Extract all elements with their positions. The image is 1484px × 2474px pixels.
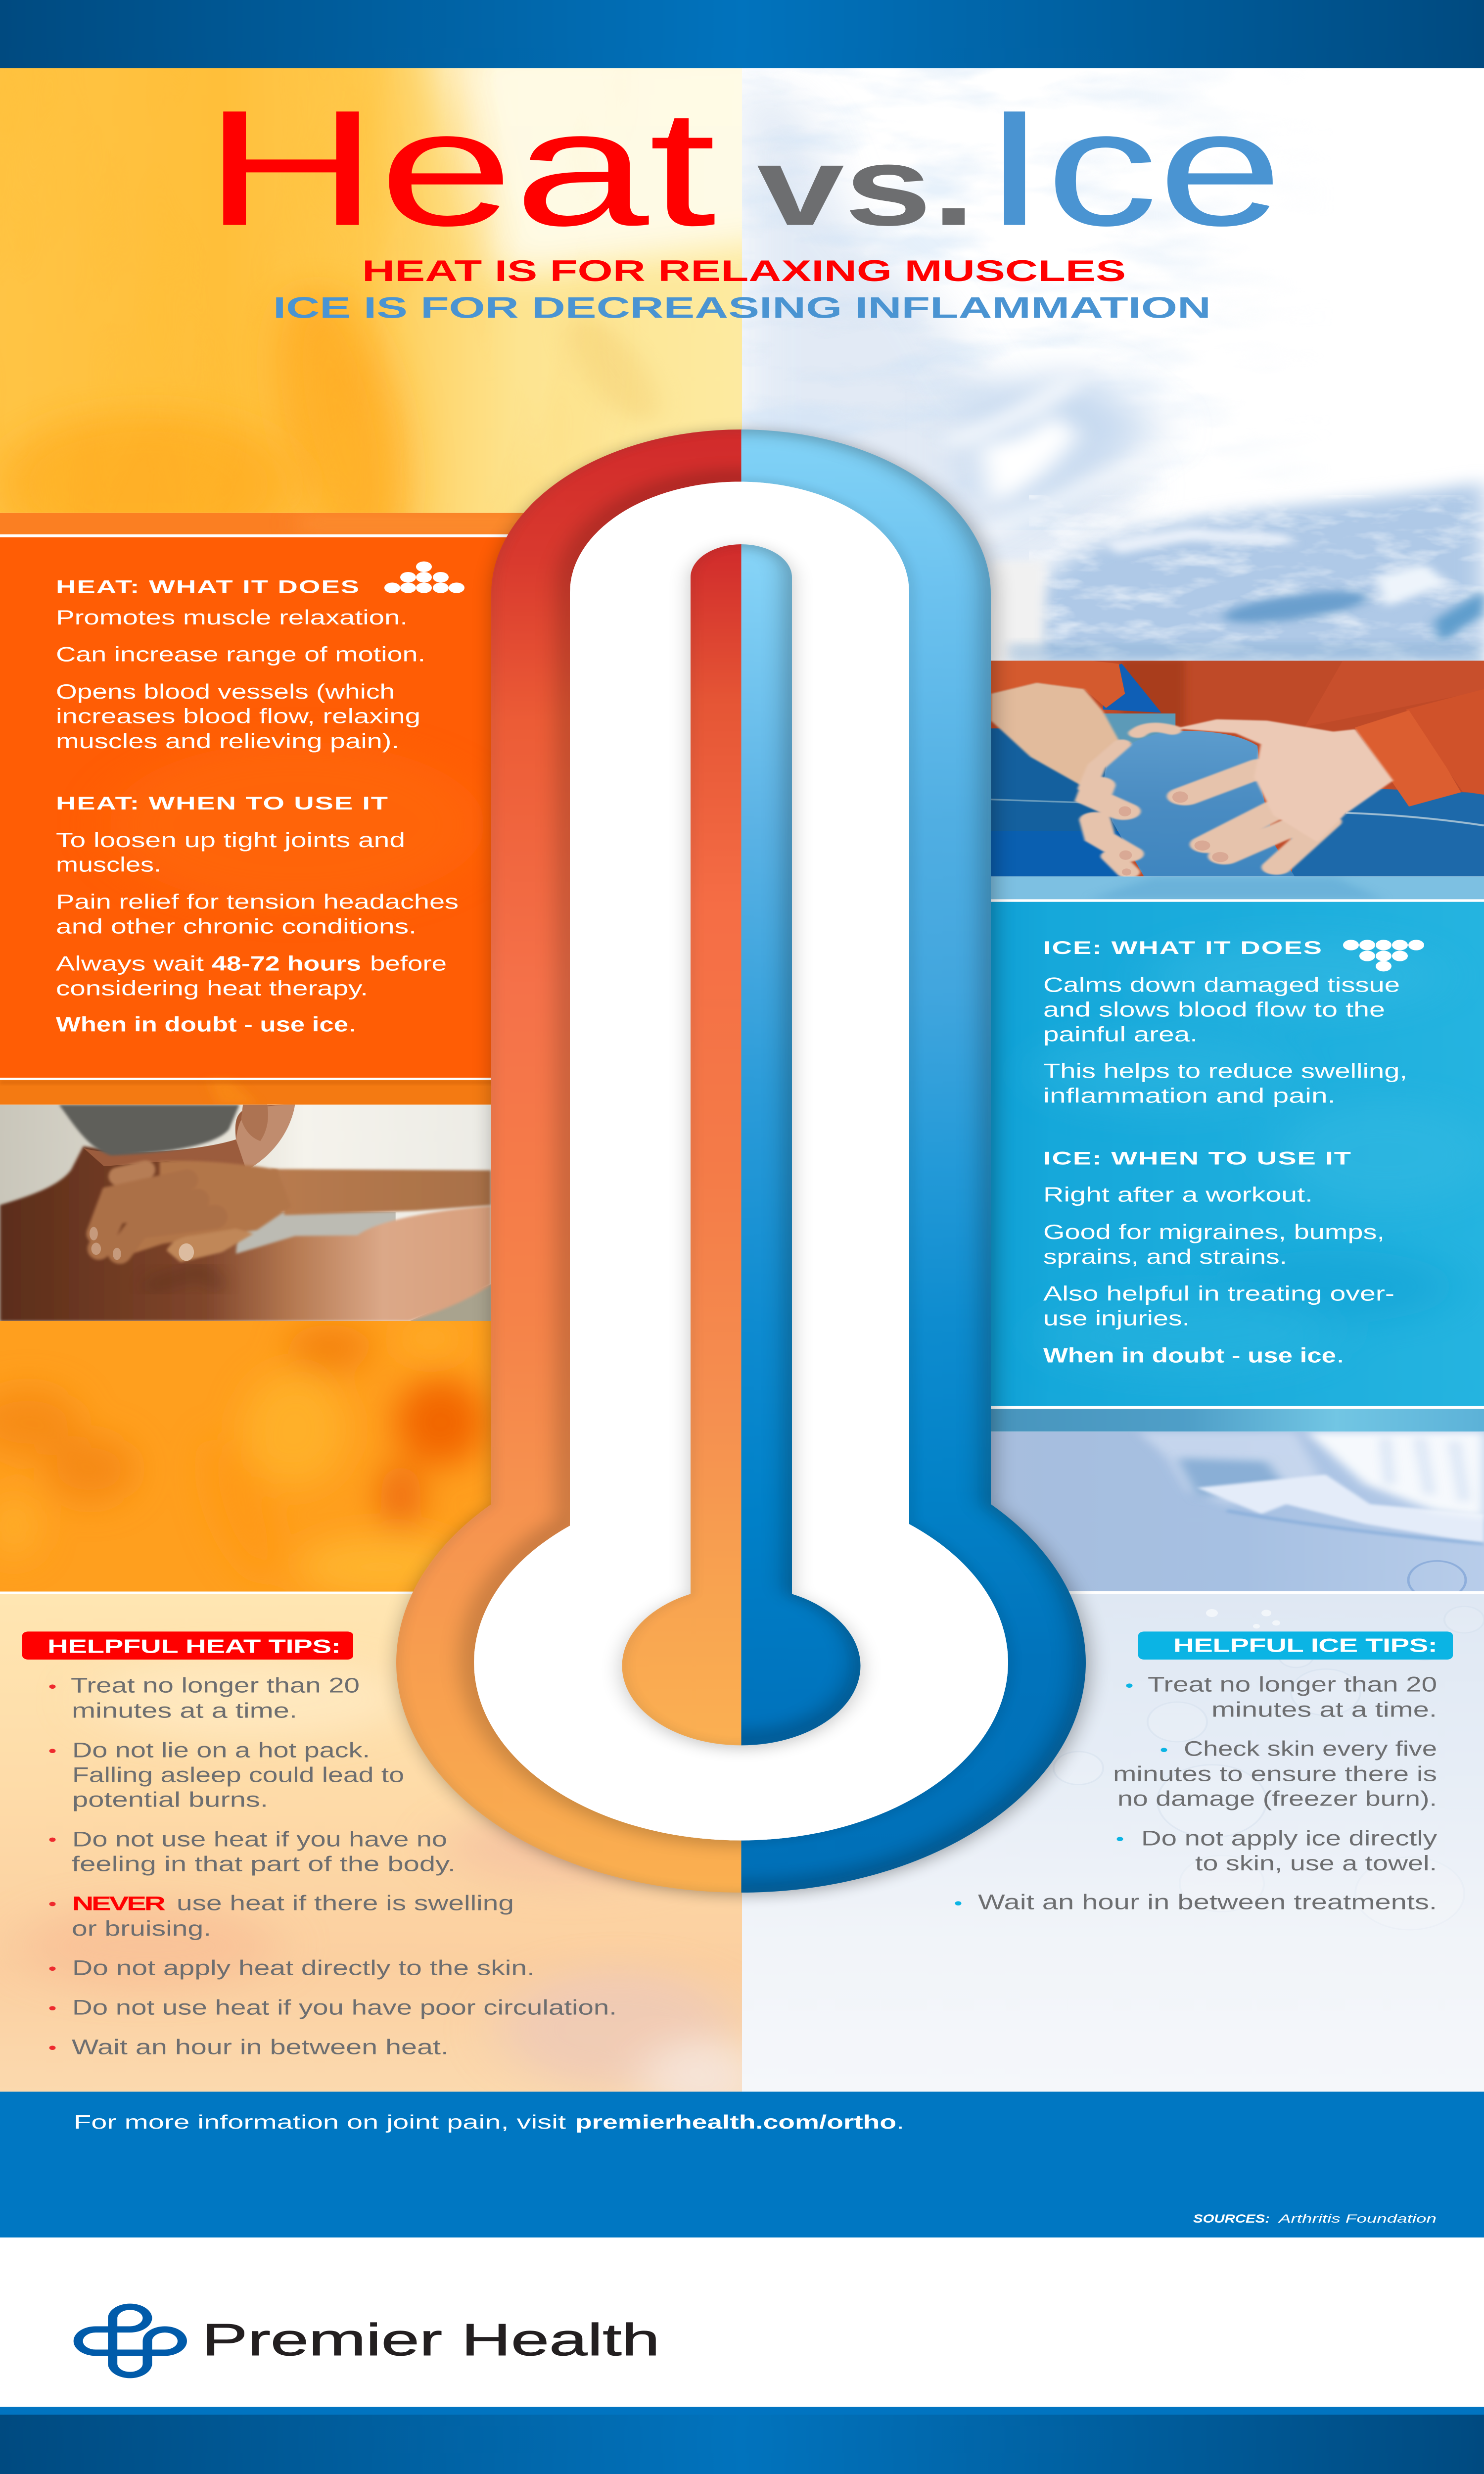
- text block: heat what it does: Can increase range of motion.: [56, 643, 425, 666]
- title: Heat: [203, 76, 717, 260]
- text block: heat when to use it: 48-72 hours: [212, 952, 361, 975]
- text block: heat when to use it: To loosen up tight joints and: [56, 829, 405, 852]
- list: heat tips: [49, 1673, 617, 2059]
- text block: heat when to use it: Always wait: [56, 952, 204, 975]
- text block: ice what it does: painful area.: [1043, 1023, 1198, 1046]
- list: heat tips: Do not lie on a hot pack.: [72, 1738, 370, 1762]
- title: [203, 76, 1283, 260]
- list: ice tips: to skin, use a towel.: [1195, 1852, 1437, 1875]
- photo: hands on knee: [991, 661, 1484, 877]
- text block: heat when to use it: muscles.: [56, 853, 161, 876]
- more information line: premierhealth.com/ortho: [575, 2111, 896, 2133]
- badge: helpful ice tips: HELPFUL ICE TIPS:: [1173, 1635, 1438, 1656]
- list: heat tips: Do not use heat if you have no: [72, 1827, 447, 1851]
- title: vs.: [757, 124, 975, 249]
- text block: heat what it does: Promotes muscle relaxation.: [56, 606, 408, 629]
- subtitle: HEAT IS FOR RELAXING MUSCLES: [362, 255, 1126, 287]
- icon: heat dots pointing up: [384, 562, 464, 593]
- more information line: .: [896, 2111, 904, 2133]
- text block: heat when to use it: before: [370, 952, 447, 975]
- text block: ice when to use it: .: [1336, 1344, 1345, 1367]
- text block: heat when to use it: Pain relief for tension headaches: [56, 891, 459, 913]
- subtitle: [273, 255, 1211, 325]
- text block: heat what it does: muscles and relieving pain).: [56, 730, 399, 753]
- list: ice tips: [955, 1672, 1438, 1914]
- list: heat tips: feeling in that part of the body.: [72, 1852, 456, 1876]
- text block: ice when to use it: When in doubt - use ice: [1043, 1344, 1336, 1367]
- thermometer drop shadow: [399, 431, 1089, 1895]
- logo: premier health: Premier Health: [202, 2315, 660, 2365]
- sources: Arthritis Foundation: [1278, 2212, 1437, 2225]
- text block: heat what it does: HEAT: WHAT IT DOES: [56, 577, 359, 597]
- text block: heat when to use it: [56, 793, 459, 1036]
- background: heat flame texture: [0, 68, 742, 513]
- sources: SOURCES:: [1193, 2212, 1270, 2225]
- list: ice tips: Do not apply ice directly: [1141, 1826, 1438, 1850]
- title: Ice: [983, 76, 1283, 260]
- panel: helpful heat tips background: [0, 1594, 762, 2118]
- top header band: [0, 0, 1484, 68]
- text block: ice when to use it: Good for migraines, bumps,: [1043, 1221, 1385, 1243]
- list: heat tips: minutes at a time.: [72, 1699, 297, 1722]
- list: heat tips: or bruising.: [72, 1917, 211, 1940]
- list: heat tips: Wait an hour in between heat.: [72, 2035, 449, 2059]
- text block: ice what it does: and slows blood flow to the: [1043, 999, 1385, 1021]
- text block: ice what it does: Calms down damaged tissue: [1043, 974, 1400, 997]
- logo: premier health: [78, 2307, 660, 2375]
- text block: ice what it does: inflammation and pain.: [1043, 1085, 1336, 1107]
- text block: heat when to use it: considering heat therapy.: [56, 977, 368, 1000]
- text block: heat what it does: Opens blood vessels (which: [56, 680, 395, 703]
- text block: ice when to use it: [1043, 1148, 1394, 1367]
- ice photo block: [991, 1431, 1484, 1599]
- icon: ice dots pointing down: [1343, 940, 1424, 971]
- icon: premier health cross: [78, 2307, 182, 2375]
- badge: helpful ice tips: [1138, 1631, 1453, 1660]
- thermometer white interior: [474, 481, 1008, 1841]
- list: ice tips: no damage (freezer burn).: [1117, 1787, 1437, 1810]
- list: heat tips: Treat no longer than 20: [71, 1673, 360, 1697]
- text block: ice when to use it: ICE: WHEN TO USE IT: [1043, 1148, 1351, 1169]
- list: heat tips: Falling asleep could lead to: [72, 1763, 404, 1787]
- text block: heat when to use it: HEAT: WHEN TO USE IT: [56, 793, 388, 814]
- thermometer mercury column: [594, 538, 889, 1748]
- flame photo block: [0, 1321, 594, 1597]
- subtitle: ICE IS FOR DECREASING INFLAMMATION: [273, 291, 1211, 325]
- text block: ice what it does: This helps to reduce swelling,: [1043, 1060, 1407, 1083]
- footer blue band: [0, 2092, 1484, 2237]
- text block: ice what it does: [1043, 938, 1407, 1107]
- panel: heat info: [0, 513, 523, 1105]
- text block: ice when to use it: Also helpful in treating over-: [1043, 1283, 1394, 1305]
- text block: ice when to use it: use injuries.: [1043, 1307, 1190, 1330]
- text block: heat what it does: [56, 577, 425, 753]
- panel: ice info: [991, 876, 1484, 1431]
- text block: ice when to use it: Right after a workout.: [1043, 1184, 1313, 1206]
- list: ice tips: minutes at a time.: [1211, 1698, 1437, 1721]
- badge: helpful heat tips: [22, 1631, 353, 1660]
- list: heat tips: Do not apply heat directly to the skin.: [72, 1956, 535, 1980]
- list: ice tips: minutes to ensure there is: [1113, 1762, 1437, 1786]
- thermometer outer tube and bulb: [346, 425, 1137, 1894]
- photo: man holding neck: [0, 1105, 491, 1321]
- badge: helpful heat tips: HELPFUL HEAT TIPS:: [47, 1636, 341, 1657]
- list: heat tips: Do not use heat if you have poor circulation.: [72, 1996, 617, 2019]
- list: ice tips: Treat no longer than 20: [1148, 1672, 1437, 1696]
- list: ice tips: Check skin every five: [1184, 1737, 1437, 1760]
- text block: heat when to use it: .: [348, 1013, 357, 1036]
- text block: heat what it does: increases blood flow, relaxing: [56, 705, 420, 728]
- text block: ice what it does: ICE: WHAT IT DOES: [1043, 938, 1322, 958]
- list: heat tips: potential burns.: [72, 1788, 268, 1811]
- list: ice tips: Wait an hour in between treatments.: [978, 1890, 1437, 1914]
- list: heat tips: use heat if there is swelling: [177, 1891, 514, 1915]
- text block: ice when to use it: sprains, and strains.: [1043, 1245, 1287, 1268]
- more information line: [74, 2111, 904, 2133]
- icon: thermometer: [346, 425, 1137, 1895]
- divider lines of the tips panels: [0, 1591, 1484, 1594]
- list: heat tips: NEVER: [72, 1893, 166, 1914]
- bottom band: [0, 2407, 1484, 2474]
- background: ice texture: [742, 68, 1484, 662]
- text block: heat when to use it: When in doubt - use ice: [56, 1013, 348, 1036]
- more information line: For more information on joint pain, visit: [74, 2111, 566, 2133]
- text block: heat when to use it: and other chronic conditions.: [56, 915, 417, 938]
- sources: [1193, 2212, 1437, 2225]
- panel: helpful ice tips background: [742, 1594, 1484, 2092]
